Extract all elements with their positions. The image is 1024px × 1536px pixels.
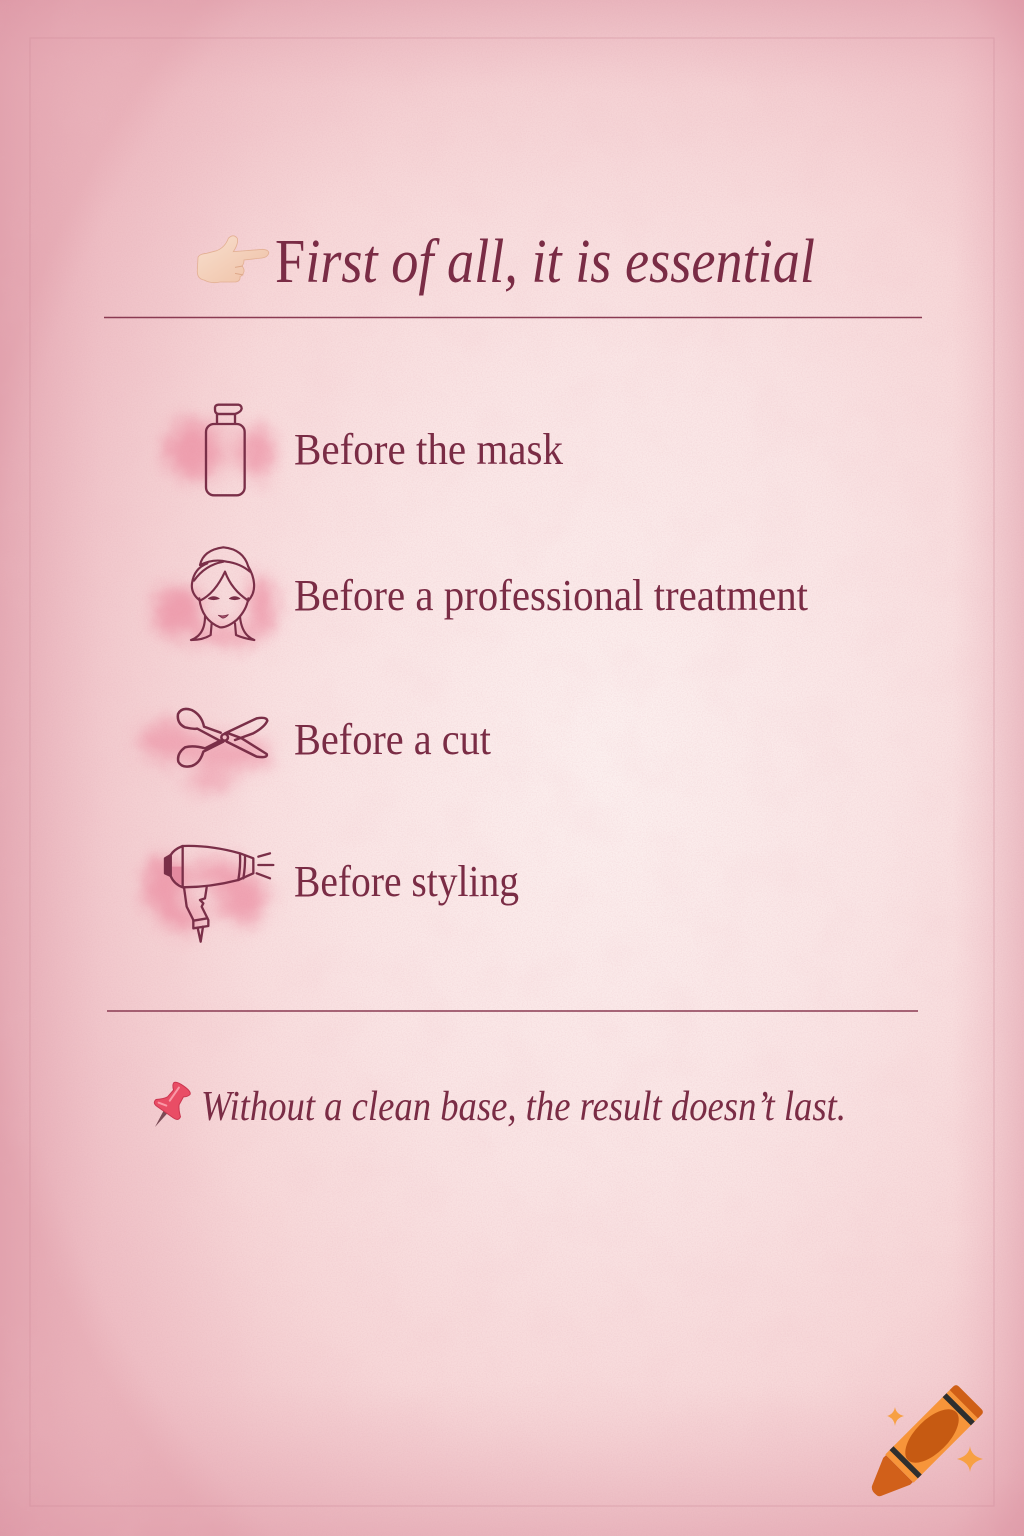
- crayon end cap: [950, 1384, 984, 1418]
- label: before a cut: Before a cut: [294, 715, 491, 764]
- icon: pointing hand: [197, 236, 269, 283]
- closing note: Without a clean base, the result doesn’t last.: [201, 1084, 846, 1130]
- icon: hair dryer: [165, 846, 273, 942]
- bottom divider: [107, 1010, 918, 1012]
- icon: bottle: [206, 405, 245, 495]
- icon: crayon: [860, 1384, 984, 1508]
- item: before a cut: [138, 709, 491, 792]
- crayon tip: [861, 1455, 913, 1507]
- icon: scissors: [178, 709, 267, 767]
- watercolor wash: face: [152, 575, 277, 645]
- item: before the mask: [166, 405, 563, 495]
- top divider: [104, 316, 922, 318]
- watercolor wash: scissors: [138, 720, 270, 792]
- label: before the mask: Before the mask: [294, 425, 563, 474]
- crayon body: [885, 1389, 979, 1483]
- sparkle: left: [887, 1407, 904, 1426]
- sparkle: right: [957, 1446, 983, 1472]
- label: before styling: Before styling: [294, 857, 519, 906]
- title: First of all, it is essential: [275, 228, 815, 296]
- icon: woman with towel: [191, 547, 254, 640]
- item: before a professional treatment: [152, 547, 808, 645]
- item: before styling: [143, 846, 519, 942]
- icon: push pin: [143, 1077, 196, 1136]
- watercolor wash: bottle: [166, 420, 273, 480]
- label: before a professional treatment: Before a professional treatment: [294, 571, 808, 620]
- watercolor wash: hair dryer: [143, 857, 268, 931]
